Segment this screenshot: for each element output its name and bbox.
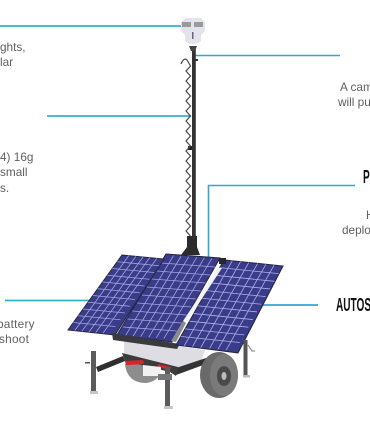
text: lighting specification: 4) 16g: [0, 150, 33, 164]
heading: power: P: [363, 167, 370, 187]
callout line: camera: [195, 54, 340, 56]
rear jack leg left: [85, 351, 98, 394]
callout line: autostart: [260, 304, 318, 306]
front jack leg: [243, 340, 255, 378]
white battery box: [143, 365, 161, 376]
chassis body: [112, 333, 206, 375]
solar panel: right: [171, 258, 283, 353]
text: lighting specification: small: [0, 165, 28, 179]
coiled cable: [181, 59, 190, 236]
callout line: lights: [0, 25, 182, 27]
text: lighting specification: [0, 150, 33, 195]
lamp head: [181, 18, 205, 44]
front wheel: [200, 352, 238, 398]
text: lighting specification: s.: [0, 181, 9, 195]
tow arm: [96, 356, 125, 372]
text: camera description: [338, 80, 370, 109]
text: lights description: [0, 40, 26, 69]
mast: [188, 46, 198, 239]
callout line: solar panels: [5, 300, 92, 302]
text: deployment description: [342, 208, 370, 237]
text: lights description: ghts,: [0, 40, 26, 54]
chassis underside: [122, 353, 178, 376]
solar panel: centre: [117, 254, 220, 342]
text: camera description: will pu: [338, 95, 370, 109]
mast base: [181, 236, 200, 255]
rear wheel: [125, 362, 160, 383]
rear jack leg right: [158, 368, 173, 409]
callout line: mast: [47, 115, 191, 117]
callout line: power elbow: [208, 186, 355, 258]
red frame accents: [125, 360, 171, 370]
solar panel: left: [68, 255, 164, 335]
text: lights description: lar: [0, 55, 13, 69]
text: battery description: [0, 317, 35, 346]
